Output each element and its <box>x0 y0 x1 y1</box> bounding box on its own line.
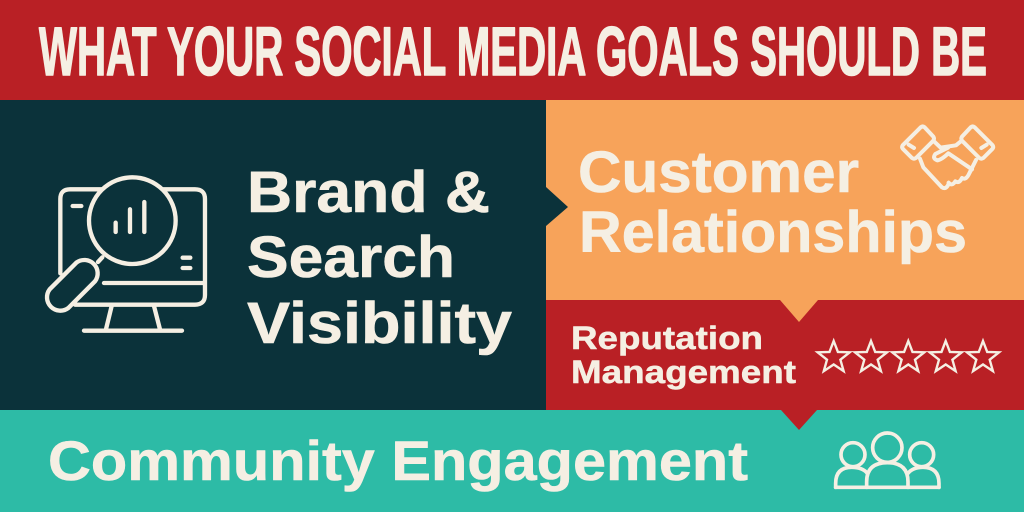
panel: community engagement <box>0 410 1024 512</box>
panel: customer relationships <box>546 100 1024 300</box>
heading: customer relationships <box>578 140 967 265</box>
heading: customer relationships: Relationships <box>579 200 967 265</box>
icon: group of people <box>836 433 939 487</box>
heading: customer relationships: Customer <box>578 140 859 205</box>
icon: monitor with magnifier <box>47 177 205 331</box>
arrow: pointing to reputation management <box>780 300 818 322</box>
panel: reputation management <box>546 300 1024 410</box>
heading: brand and search visibility <box>247 160 512 356</box>
heading: reputation management <box>571 320 796 390</box>
panel: brand and search visibility <box>0 100 568 410</box>
icon: five stars <box>818 341 999 371</box>
heading: brand and search visibility: Search <box>247 225 455 290</box>
icon: handshake <box>902 126 993 188</box>
heading: reputation management: Reputation <box>571 320 763 356</box>
arrow: pointing to customer relationships <box>546 187 568 226</box>
heading: brand and search visibility: Brand & <box>247 160 490 225</box>
panel: title banner <box>0 0 1024 100</box>
heading: community engagement: Community Engagement <box>48 429 748 492</box>
heading: brand and search visibility: Visibility <box>247 291 512 356</box>
arrow: pointing to community engagement <box>781 410 817 430</box>
heading: reputation management: Management <box>571 354 796 390</box>
